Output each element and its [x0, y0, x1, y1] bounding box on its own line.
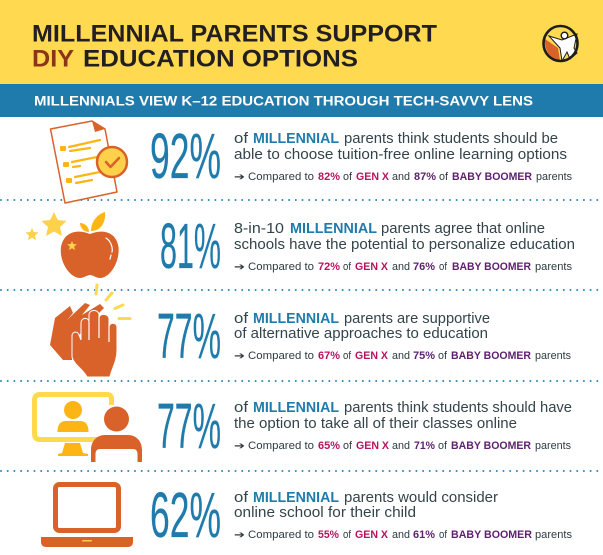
comparison line 2: BABY BOOMER [452, 261, 531, 273]
comparison line 4 [234, 440, 572, 452]
comparison line 4: of [438, 440, 448, 452]
icon: video call on monitor [34, 394, 142, 462]
comparison line 5: BABY BOOMER [451, 529, 532, 541]
title: MILLENNIAL PARENTS SUPPORT [32, 21, 437, 48]
comparison line 2: of [343, 261, 352, 273]
comparison line 5: 55% [318, 529, 339, 541]
icon: checklist document [50, 121, 127, 203]
comparison line 3: 75% [413, 350, 435, 362]
comparison line 1: parents [536, 171, 573, 183]
text block: finding 4: MILLENNIAL [253, 400, 339, 416]
comparison line 3: GEN X [355, 350, 389, 362]
comparison line 4: 71% [414, 440, 435, 452]
statistic: 92%: 92% [150, 120, 221, 192]
text block: finding 3: of alternative approaches to education [234, 326, 488, 342]
text block: finding 2: MILLENNIAL [290, 221, 377, 237]
comparison line 1: GEN X [356, 171, 390, 183]
panel: row 4 all classes online [34, 390, 572, 462]
text block: finding 5 [234, 490, 498, 521]
comparison line 4: and [392, 440, 410, 452]
comparison line 5: Compared to [248, 529, 314, 541]
comparison line 2 [234, 261, 573, 273]
text block: finding 3: MILLENNIAL [253, 311, 339, 327]
text block: finding 1: able to choose tuition-free online learning options [234, 147, 567, 163]
comparison line 2: of [439, 261, 448, 273]
comparison line 1: 87% [414, 171, 436, 183]
comparison line 5: of [439, 529, 448, 541]
comparison line 5: ➔ [234, 530, 245, 541]
panel: row 2 personalized education: 81% [160, 210, 221, 282]
comparison line 2: parents [535, 261, 573, 273]
text block: finding 2: schools have the potential to personalize education [234, 237, 575, 253]
text block: finding 1: parents think students should be [344, 131, 558, 147]
comparison line 4: BABY BOOMER [451, 440, 531, 452]
icon: logo [544, 26, 578, 61]
comparison line 4: ➔ [234, 441, 245, 452]
comparison line 4: 65% [318, 440, 340, 452]
text block: finding 2 [234, 221, 575, 253]
icon: laptop [41, 484, 133, 547]
comparison line 1: of [343, 171, 353, 183]
text block: finding 3 [234, 311, 490, 342]
comparison line 3 [234, 350, 572, 362]
text block: finding 5: of [234, 490, 249, 506]
comparison line 2: Compared to [248, 261, 314, 273]
text block: finding 3: of [234, 311, 249, 327]
comparison line 3: of [438, 350, 448, 362]
comparison line 3: of [343, 350, 352, 362]
comparison line 5: parents [535, 529, 573, 541]
comparison line 5 [234, 529, 573, 541]
text block: finding 5: MILLENNIAL [253, 490, 339, 506]
text block: finding 3: parents are supportive [344, 311, 490, 327]
icon: apple with stars [26, 212, 119, 278]
comparison line 1 [234, 171, 573, 183]
comparison line 5: 61% [413, 529, 435, 541]
comparison line 1: and [392, 171, 410, 183]
comparison line 1: BABY BOOMER [452, 171, 532, 183]
comparison line 1: Compared to [248, 171, 314, 183]
comparison line 2: and [392, 261, 410, 273]
title [32, 21, 437, 73]
comparison line 1: 82% [318, 171, 340, 183]
text block: finding 1 [234, 131, 567, 163]
panel: row 3 alternative approaches [50, 285, 572, 377]
header banner [0, 0, 603, 84]
subheading band [0, 84, 603, 117]
comparison line 5: of [343, 529, 352, 541]
text block: finding 4: parents think students should have [344, 400, 572, 416]
subheading band: MILLENNIALS VIEW K–12 EDUCATION THROUGH TECH-SAVVY LENS [34, 94, 533, 109]
panel: row 3 alternative approaches: 77% [157, 300, 221, 372]
comparison line 3: parents [535, 350, 572, 362]
title: EDUCATION OPTIONS [83, 46, 358, 73]
comparison line 4: Compared to [248, 440, 314, 452]
text block: finding 4: of [234, 400, 249, 416]
comparison line 2: ➔ [234, 262, 245, 273]
panel: row 2 personalized education [26, 210, 575, 282]
comparison line 3: BABY BOOMER [451, 350, 531, 362]
comparison line 2: 72% [318, 261, 340, 273]
text block: finding 1: of [234, 131, 249, 147]
comparison line 4: of [343, 440, 353, 452]
panel: row 4 all classes online: 77% [157, 390, 221, 462]
text block: finding 2: parents agree that online [381, 221, 545, 237]
comparison line 3: Compared to [248, 350, 314, 362]
title: DIY [32, 46, 74, 73]
statistic: 62%: 62% [150, 479, 221, 551]
text block: finding 2: 8-in-10 [234, 221, 284, 237]
text block: finding 4: the option to take all of their classes online [234, 416, 517, 432]
text block: finding 5: parents would consider [344, 490, 498, 506]
comparison line 2: 76% [413, 261, 435, 273]
comparison line 3: and [392, 350, 410, 362]
comparison line 4: GEN X [356, 440, 390, 452]
panel: row 1 tuition-free options [50, 120, 573, 203]
text block: finding 1: MILLENNIAL [253, 131, 339, 147]
comparison line 3: 67% [318, 350, 340, 362]
text block: finding 4 [234, 400, 572, 432]
text block: finding 5: online school for their child [234, 505, 416, 521]
comparison line 5: GEN X [355, 529, 389, 541]
comparison line 1: ➔ [234, 172, 245, 183]
panel: row 5 consider online school [41, 479, 573, 551]
icon: clapping hands [50, 285, 130, 377]
comparison line 2: GEN X [355, 261, 389, 273]
comparison line 4: parents [535, 440, 572, 452]
comparison line 1: of [439, 171, 449, 183]
comparison line 3: ➔ [234, 351, 245, 362]
comparison line 5: and [392, 529, 410, 541]
